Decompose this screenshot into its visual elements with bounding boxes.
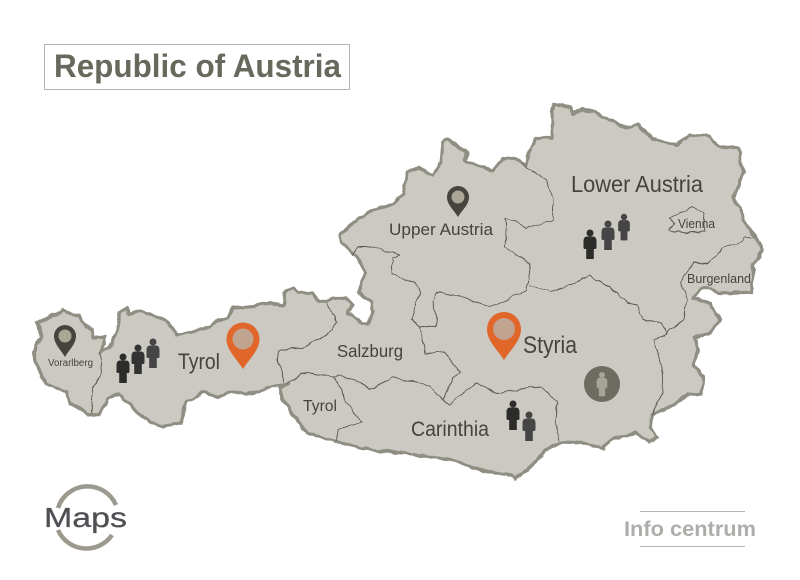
logo: Maps bbox=[44, 486, 127, 549]
title: Republic of Austria bbox=[54, 48, 341, 84]
label: Upper Austria: Upper Austria bbox=[389, 220, 494, 239]
map: Austria outline bbox=[33, 105, 763, 480]
logo: Maps: Maps bbox=[44, 502, 127, 533]
footer: Info centrum bbox=[624, 512, 756, 546]
label: Burgenland: Burgenland bbox=[687, 272, 751, 286]
footer: Info centrum: Info centrum bbox=[624, 518, 756, 541]
pin: Tyrol bbox=[226, 323, 260, 369]
label: Styria: Styria bbox=[523, 332, 578, 359]
pin: Upper Austria bbox=[447, 186, 469, 217]
label: Tyrol: Tyrol bbox=[178, 349, 220, 374]
label: East Tyrol: Tyrol bbox=[303, 398, 337, 415]
label: Carinthia: Carinthia bbox=[411, 418, 489, 441]
pin: Vorarlberg bbox=[54, 325, 76, 357]
label: Vienna: Vienna bbox=[678, 217, 715, 231]
people: Lower Austria bbox=[584, 214, 630, 259]
label: Salzburg: Salzburg bbox=[337, 341, 403, 361]
pin: Styria bbox=[487, 312, 521, 360]
map: state borders bbox=[92, 163, 752, 442]
label: Vorarlberg: Vorarlberg bbox=[48, 358, 93, 369]
icon: person badge bbox=[584, 366, 620, 402]
label: Lower Austria: Lower Austria bbox=[571, 171, 703, 197]
people: Carinthia bbox=[506, 400, 536, 441]
people: Tyrol bbox=[116, 338, 160, 383]
